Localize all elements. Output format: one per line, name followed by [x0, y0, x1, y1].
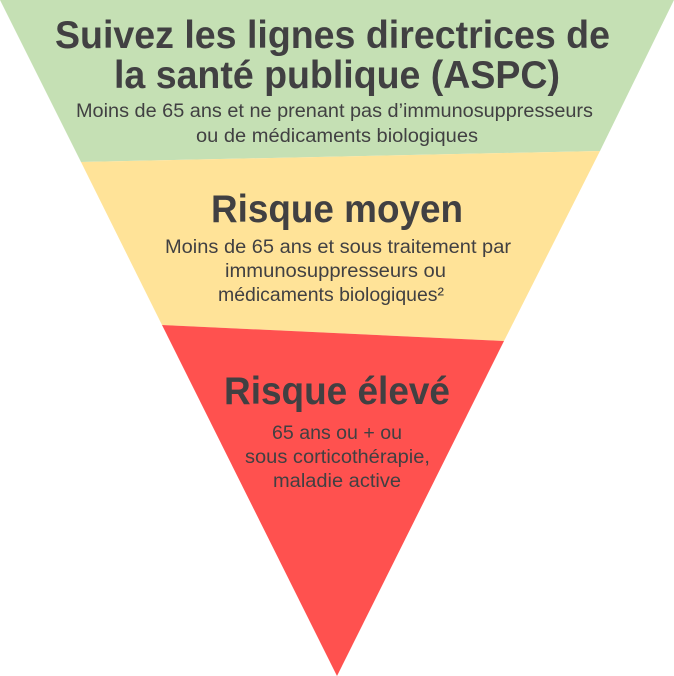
text: red tier description: maladie active — [273, 471, 401, 492]
text: yellow tier description: médicaments biologiques² — [218, 285, 444, 306]
heading: follow public health guidelines — [55, 14, 610, 97]
heading: follow public health guidelines: la santé publique (ASPC) — [114, 54, 560, 97]
panel: medium risk (yellow) — [81, 151, 600, 341]
text: green tier description: Moins de 65 ans et ne prenant pas d’immunosuppresseurs — [76, 101, 593, 122]
heading: medium risk: Risque moyen — [211, 188, 463, 231]
heading: high risk: Risque élevé — [224, 370, 450, 413]
text: red tier description — [245, 423, 430, 492]
heading: follow public health guidelines: Suivez les lignes directrices de — [55, 14, 610, 57]
text: yellow tier description: immunosuppresseurs ou — [225, 261, 446, 282]
text: red tier description: 65 ans ou + ou — [272, 423, 402, 444]
text: green tier description — [76, 101, 593, 147]
text: yellow tier description: Moins de 65 ans et sous traitement par — [165, 237, 512, 258]
text: green tier description: ou de médicaments biologiques — [196, 126, 478, 147]
text: yellow tier description — [165, 237, 512, 306]
panel: high risk (red) — [162, 325, 504, 676]
text: red tier description: sous corticothérapie, — [245, 447, 430, 468]
panel: public health guidelines (green) — [0, 0, 674, 162]
